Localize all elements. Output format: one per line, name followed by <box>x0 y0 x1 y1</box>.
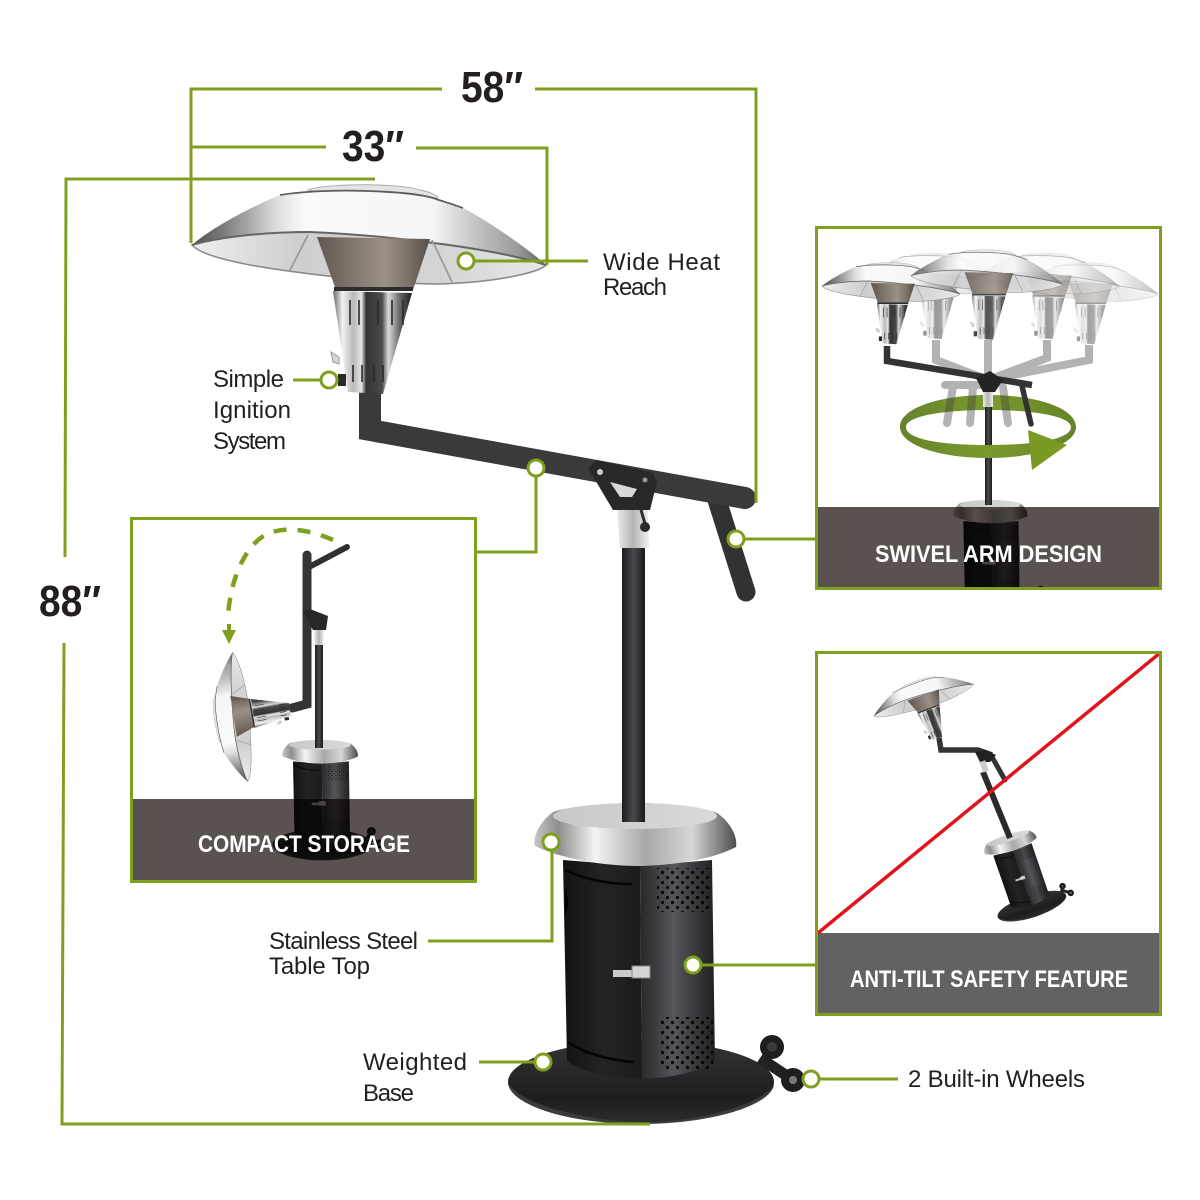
heater pole <box>622 546 645 822</box>
solid heater head <box>822 263 960 344</box>
swivel heater base <box>953 500 1044 587</box>
folded bracket <box>303 609 328 645</box>
callout: wide heat reach <box>458 249 720 301</box>
callout: simple ignition system: Ignition <box>213 397 291 424</box>
folded pole <box>315 628 323 748</box>
callout: built-in wheels <box>803 1066 1085 1093</box>
red prohibition line <box>818 653 1160 933</box>
callout: weighted base <box>363 1049 551 1107</box>
faded heater heads <box>863 253 1158 344</box>
dimension: 58 inch <box>191 63 756 503</box>
callout: wide heat reach: Wide Heat <box>603 249 720 276</box>
callout: weighted base: Weighted <box>363 1049 467 1076</box>
caption: compact storage: COMPACT STORAGE <box>198 831 410 858</box>
dimension: 88 inch: 88″ <box>39 577 101 626</box>
caption: swivel arm design: SWIVEL ARM DESIGN <box>875 541 1102 568</box>
folded arm <box>292 555 307 708</box>
caption band <box>133 799 474 880</box>
connector: handle to swivel panel <box>728 531 816 547</box>
heater base with table top and wheels <box>508 803 805 1124</box>
rotation ring arrow <box>900 395 1076 470</box>
swivel arm <box>370 393 745 498</box>
callout: stainless steel table top <box>269 834 559 980</box>
dimension: 33 inch: 33″ <box>342 122 404 171</box>
connector: arm to compact storage panel <box>476 460 544 552</box>
callout: simple ignition system <box>213 366 337 455</box>
caption band <box>818 507 1159 587</box>
solid arm and handle <box>887 346 1032 424</box>
dimension: 33 inch <box>191 122 547 265</box>
callout: stainless steel table top: Table Top <box>269 953 370 980</box>
folded heater head <box>203 644 301 785</box>
centre heater head <box>911 250 1063 340</box>
pole collar <box>617 510 649 548</box>
hub and collar <box>976 371 1003 445</box>
panel: swivel arm design <box>816 228 1160 619</box>
panel: anti-tilt safety feature <box>816 652 1160 1014</box>
callout: stainless steel table top: Stainless Steel <box>269 928 418 955</box>
caption: anti-tilt safety feature: ANTI-TILT SAFETY FEATURE <box>850 966 1128 993</box>
callout: wide heat reach: Reach <box>603 274 667 301</box>
panel: compact storage <box>132 518 476 882</box>
faded arm positions <box>936 340 1089 423</box>
connector: body to anti-tilt panel <box>685 957 816 973</box>
main heater product <box>192 185 805 1124</box>
arm handle <box>717 500 746 592</box>
folded heater base <box>272 740 384 860</box>
dashed arc arrow <box>222 530 333 644</box>
tilted heater <box>868 662 1077 928</box>
arm bracket <box>588 460 657 532</box>
callout: simple ignition system: System <box>213 428 286 455</box>
caption band <box>818 933 1159 1013</box>
callout: simple ignition system: Simple <box>213 366 284 393</box>
swivel pole <box>985 405 992 505</box>
callout: built-in wheels: 2 Built-in Wheels <box>908 1066 1085 1093</box>
dimension: 58 inch: 58″ <box>461 63 523 112</box>
folded handle <box>311 547 347 566</box>
callout: weighted base: Base <box>363 1080 414 1107</box>
heater head with reflector shade <box>192 185 546 394</box>
